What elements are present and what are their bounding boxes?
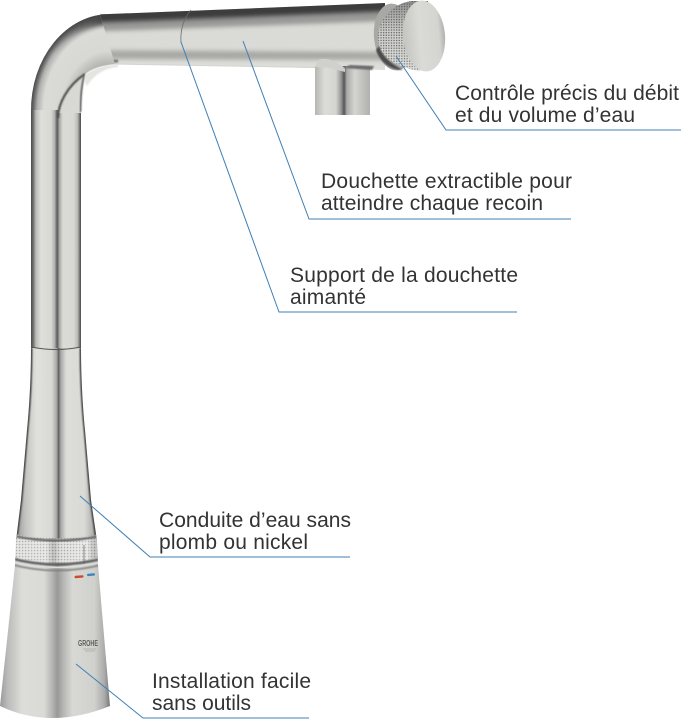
callout: waterway: Conduite d’eau sans — [159, 509, 351, 532]
hot marker — [74, 575, 84, 578]
lower body — [0, 348, 120, 720]
control knob — [371, 0, 448, 73]
column seam — [31, 347, 81, 350]
spout — [315, 59, 374, 115]
callout: easy installation — [76, 664, 311, 718]
callout: flow control: Contrôle précis du débit — [455, 82, 679, 105]
callout: flow control — [396, 56, 681, 130]
column right edge top — [80, 75, 84, 112]
callout: magnetic holder: aimanté — [290, 286, 366, 309]
callout: pull-out spray — [243, 41, 572, 219]
faucet arm — [100, 3, 385, 70]
column inner contour — [58, 74, 85, 118]
callout: pull-out spray: atteindre chaque recoin — [321, 192, 543, 215]
base cone — [0, 550, 120, 720]
callout: waterway: plomb ou nickel — [159, 531, 308, 554]
callout: magnetic holder: Support de la douchette — [290, 264, 518, 287]
cold marker — [87, 573, 95, 576]
callout: easy installation: Installation facile — [152, 670, 311, 693]
column inner panel — [58, 74, 85, 113]
knob face — [400, 0, 448, 73]
knurled ring — [14, 534, 98, 572]
faucet upper column — [31, 110, 81, 350]
callout: magnetic holder — [181, 42, 518, 312]
arm seam — [181, 10, 191, 43]
callout: easy installation: sans outils — [152, 692, 251, 715]
faucet bend — [31, 14, 118, 112]
faucet — [0, 0, 448, 720]
brand logo: GROHE — [78, 639, 98, 648]
bend top shading — [57, 14, 104, 50]
callout: flow control: et du volume d’eau — [455, 104, 635, 127]
callout: pull-out spray: Douchette extractible pour — [321, 170, 572, 193]
body edge shading — [16, 348, 97, 541]
brand logo — [78, 639, 98, 651]
knurled band — [378, 1, 428, 71]
knob collar — [371, 2, 417, 72]
callout: waterway — [80, 496, 351, 557]
fillet under arm — [85, 64, 118, 86]
arm bottom edge — [115, 64, 315, 68]
